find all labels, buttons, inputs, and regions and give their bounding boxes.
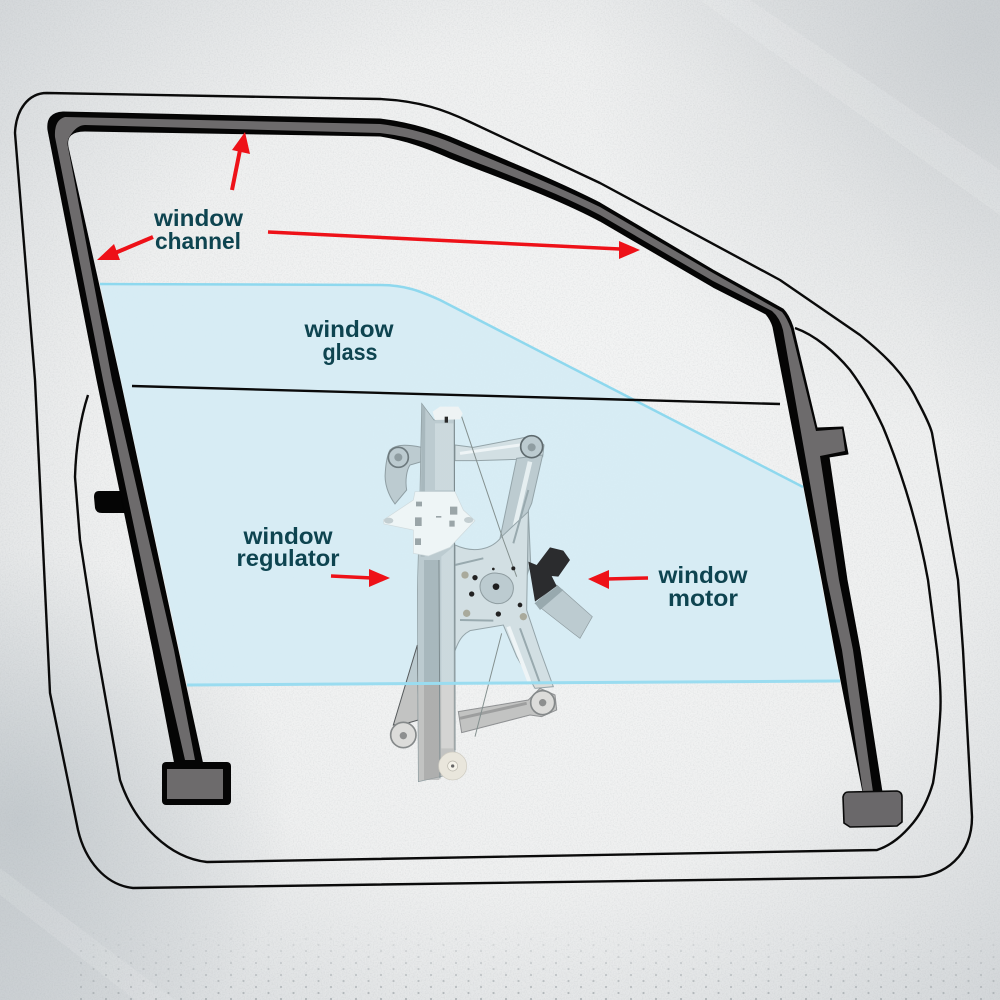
- right channel foot: [843, 791, 902, 827]
- label: window regulator: regulator: [236, 545, 340, 571]
- lower cross arm: [458, 688, 557, 733]
- arrow: to left of channel: [97, 237, 153, 260]
- left mounting tab: [94, 491, 128, 513]
- top slider: [433, 407, 463, 420]
- window glass panel: [100, 284, 840, 685]
- right diagonal arm: [500, 455, 543, 577]
- pivot knobs: [388, 447, 408, 467]
- door inner outline: [75, 328, 941, 862]
- upper left arm: [385, 445, 422, 504]
- lower pulley: [439, 752, 467, 780]
- window channel frame: [48, 112, 882, 792]
- label: window motor: motor: [668, 585, 738, 611]
- label: window motor: window: [657, 562, 748, 588]
- plate shading: [455, 490, 540, 683]
- arrow: to top of channel: [232, 132, 250, 190]
- gear hub: [480, 573, 513, 604]
- label: window channel: window: [153, 205, 243, 231]
- label: window motor: [657, 562, 748, 611]
- motor connector: [528, 547, 570, 602]
- white glass carrier: [383, 492, 475, 556]
- main plate: [455, 512, 553, 688]
- label: window glass: glass: [322, 339, 378, 365]
- door outer outline: [15, 93, 972, 888]
- arrow: to regulator: [331, 569, 390, 587]
- arrow: to motor: [588, 570, 648, 589]
- plate holes and bolts: [469, 566, 522, 617]
- arrow: to right of channel: [268, 232, 640, 259]
- glass reference line: [132, 386, 780, 404]
- label: window regulator: window: [242, 523, 333, 549]
- cables: [462, 417, 517, 737]
- glass bottom edge: [187, 681, 840, 685]
- label: window glass: window: [303, 316, 394, 342]
- motor body: [535, 585, 592, 638]
- lower left strut: [393, 645, 418, 725]
- label: window regulator: [236, 523, 340, 571]
- label: window channel: channel: [155, 228, 241, 254]
- upper cross arm: [455, 436, 544, 461]
- window regulator assembly: [383, 403, 592, 782]
- label: window glass: [303, 316, 394, 365]
- label: window channel: [153, 205, 243, 254]
- left channel foot: [162, 762, 231, 805]
- guide rail: [417, 403, 455, 782]
